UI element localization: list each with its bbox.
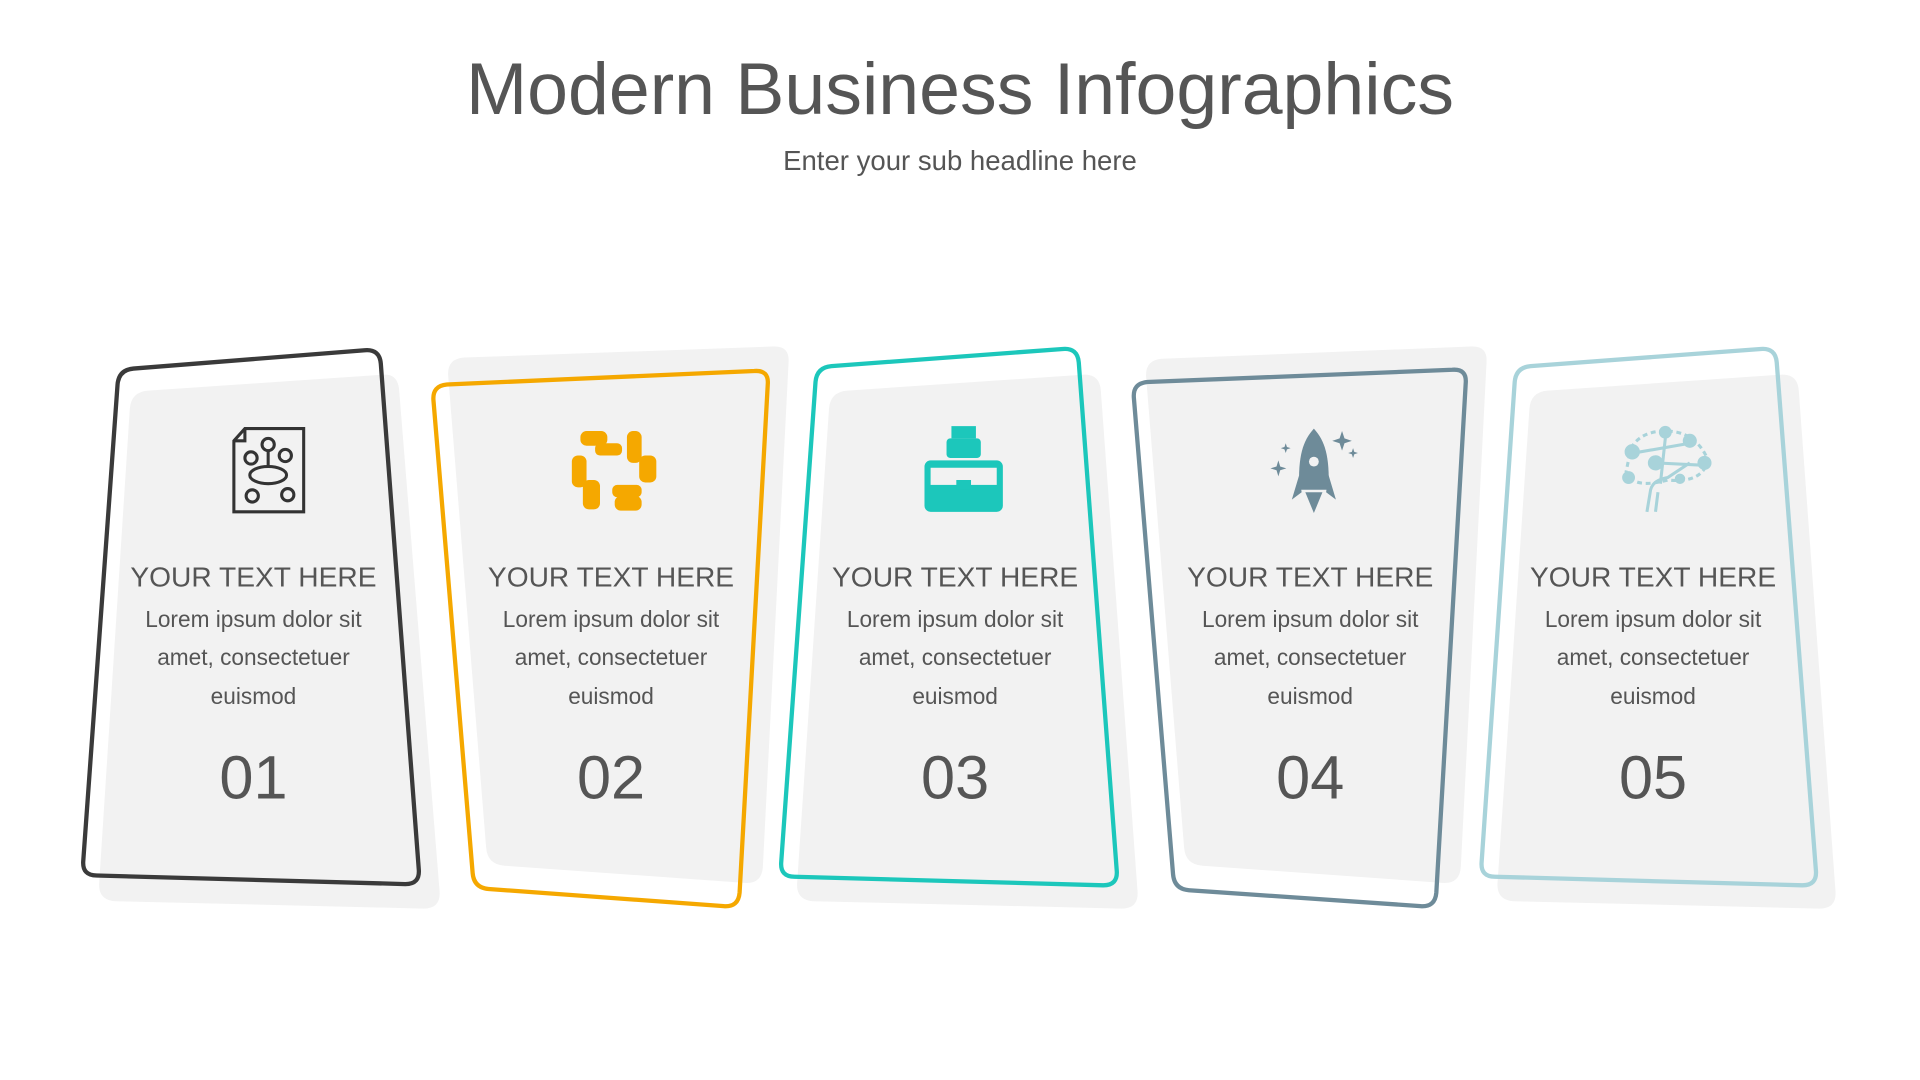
number: 04 bbox=[1276, 743, 1344, 811]
body text: amet, consectetuer bbox=[1214, 644, 1407, 670]
heading: YOUR TEXT HERE bbox=[832, 562, 1078, 593]
body text: Lorem ipsum dolor sit bbox=[1202, 606, 1419, 632]
body text bbox=[1202, 606, 1419, 709]
icon: document diagram bbox=[234, 429, 304, 512]
panel: card 05 bbox=[1482, 349, 1836, 909]
body text: Lorem ipsum dolor sit bbox=[1545, 606, 1762, 632]
heading: YOUR TEXT HERE bbox=[1187, 562, 1433, 593]
title: Modern Business Infographics bbox=[466, 47, 1454, 130]
number: 02 bbox=[577, 743, 645, 811]
number: 05 bbox=[1619, 743, 1687, 811]
panel: card 03 bbox=[781, 349, 1138, 909]
body text: euismod bbox=[912, 683, 998, 709]
number: 03 bbox=[921, 743, 989, 811]
icon: hands bbox=[572, 431, 656, 511]
body text: euismod bbox=[1267, 683, 1353, 709]
body text: Lorem ipsum dolor sit bbox=[503, 606, 720, 632]
body text: euismod bbox=[1610, 683, 1696, 709]
icon: briefcase bbox=[924, 426, 1003, 512]
body text: euismod bbox=[211, 683, 296, 709]
body text bbox=[1545, 606, 1762, 709]
body text: Lorem ipsum dolor sit bbox=[145, 606, 362, 632]
body text: amet, consectetuer bbox=[157, 644, 350, 670]
body text: amet, consectetuer bbox=[1557, 644, 1750, 670]
body text bbox=[503, 606, 720, 709]
heading: YOUR TEXT HERE bbox=[488, 562, 734, 593]
body text: euismod bbox=[568, 683, 654, 709]
subtitle: Enter your sub headline here bbox=[783, 145, 1137, 176]
panel: card 04 bbox=[1134, 346, 1487, 906]
body text: amet, consectetuer bbox=[859, 644, 1052, 670]
body text: amet, consectetuer bbox=[515, 644, 708, 670]
body text bbox=[847, 606, 1064, 709]
panel: card 02 bbox=[433, 346, 789, 906]
icon: rocket bbox=[1270, 429, 1358, 513]
body text bbox=[145, 606, 362, 709]
body text: Lorem ipsum dolor sit bbox=[847, 606, 1064, 632]
number: 01 bbox=[219, 743, 288, 811]
heading: YOUR TEXT HERE bbox=[130, 562, 377, 593]
heading: YOUR TEXT HERE bbox=[1530, 562, 1776, 593]
panel: card 01 bbox=[83, 350, 440, 909]
icon: brain network bbox=[1624, 427, 1710, 512]
